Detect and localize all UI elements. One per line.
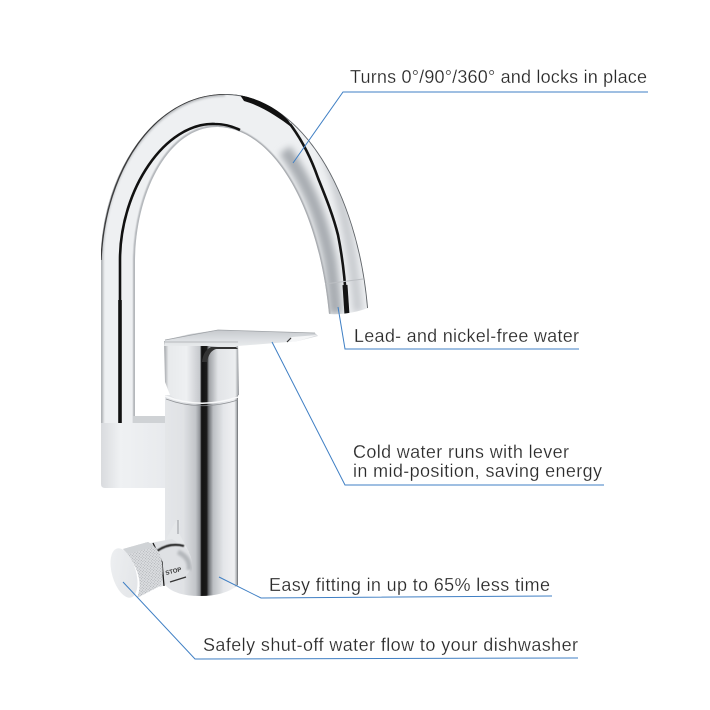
connector block bbox=[133, 416, 166, 424]
shut-off valve bbox=[105, 520, 192, 601]
leader line bbox=[293, 92, 648, 163]
lever handle bbox=[164, 330, 318, 406]
knurled grip bbox=[123, 542, 163, 598]
mounting plate bbox=[101, 423, 166, 488]
STOP label: STOP bbox=[165, 567, 182, 577]
leader line bbox=[123, 582, 578, 659]
leader line bbox=[219, 577, 552, 598]
leader line bbox=[338, 307, 579, 349]
label: Safely shut-off water flow to your dishwasher bbox=[203, 635, 578, 655]
faucet illustration bbox=[95, 88, 375, 601]
handle head bbox=[164, 341, 239, 403]
leader line bbox=[272, 342, 604, 485]
callout: dishwasher shut-off bbox=[123, 582, 578, 659]
label: Easy fitting in up to 65% less time bbox=[269, 575, 550, 595]
body bbox=[165, 395, 238, 596]
callout: easy fitting bbox=[219, 575, 552, 598]
infographic: faucet features bbox=[101, 70, 648, 660]
label: Turns 0°/90°/360° and locks in place bbox=[350, 67, 647, 87]
spout bbox=[95, 88, 375, 428]
callout: cold water mid-position bbox=[272, 342, 604, 485]
label: Lead- and nickel-free water bbox=[354, 326, 579, 346]
callout: spout rotation bbox=[293, 67, 648, 163]
cap bbox=[105, 545, 143, 601]
callout: lead-free water bbox=[338, 307, 579, 349]
label: Cold water runs with lever bbox=[353, 442, 569, 462]
valve stem bbox=[150, 539, 192, 587]
label: in mid-position, saving energy bbox=[353, 461, 602, 481]
lever paddle bbox=[164, 330, 318, 346]
